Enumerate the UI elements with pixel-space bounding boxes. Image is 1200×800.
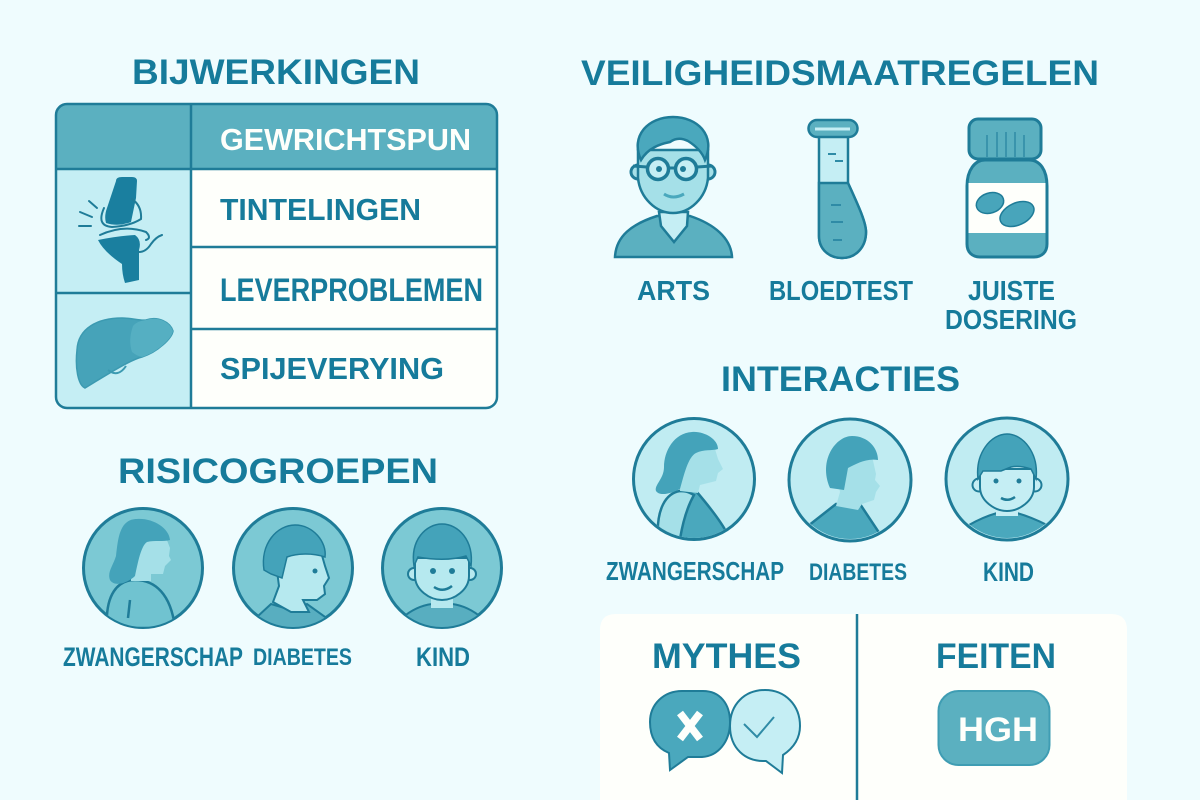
icon: liver: [76, 318, 173, 388]
label: bloedtest: BLOEDTEST: [769, 275, 913, 306]
label: juiste dosering: JUISTE: [968, 275, 1055, 306]
icon: pregnant woman in circle: [634, 418, 754, 545]
icon: blood test tube: [808, 120, 866, 258]
icon: woman in circle: [84, 508, 202, 628]
label: zwangerschap: ZWANGERSCHAP: [606, 556, 784, 586]
heading: risicogroepen: RISICOGROEPEN: [118, 452, 438, 491]
icon: HGH badge: HGH: [958, 711, 1038, 749]
label: juiste dosering: DOSERING: [945, 304, 1077, 335]
panel: side effects table: [56, 104, 497, 408]
table row: leverproblemen: LEVERPROBLEMEN: [220, 272, 483, 308]
heading: veiligheidsmaatregelen: VEILIGHEIDSMAATREGELEN: [581, 54, 1099, 93]
icon: child in circle: [946, 418, 1068, 545]
label: kind: KIND: [983, 557, 1034, 587]
label: arts: ARTS: [637, 275, 710, 306]
icon: speech bubbles with cross and check: [650, 690, 800, 773]
icon: man in circle: [789, 419, 911, 546]
group: risk group icons: [84, 508, 502, 634]
table row: spijevering: SPIJEVERYING: [220, 351, 444, 386]
label: diabetes: DIABETES: [253, 644, 352, 671]
table row: tintelingen: TINTELINGEN: [220, 192, 421, 227]
icon: joint: [79, 177, 162, 283]
heading: feiten: FEITEN: [936, 637, 1056, 676]
heading: interacties: INTERACTIES: [721, 360, 960, 399]
heading: bijwerkingen: BIJWERKINGEN: [132, 53, 420, 92]
icon: man in circle: [234, 508, 352, 634]
table header text: GEWRICHTSPUN: [220, 122, 471, 157]
heading: mythes: MYTHES: [652, 637, 801, 676]
label: diabetes: DIABETES: [809, 559, 907, 586]
label: juiste dosering: [945, 275, 1077, 335]
icon: pill bottle: [967, 119, 1047, 257]
group: interaction icons: [634, 418, 1068, 546]
icon: HGH badge: [938, 691, 1050, 765]
label: kind: KIND: [416, 642, 470, 672]
icon: child in circle: [382, 508, 502, 634]
icon: doctor: [615, 117, 732, 257]
panel: myths and facts: [600, 614, 1127, 800]
label: zwangerschap: ZWANGERSCHAP: [63, 642, 243, 672]
